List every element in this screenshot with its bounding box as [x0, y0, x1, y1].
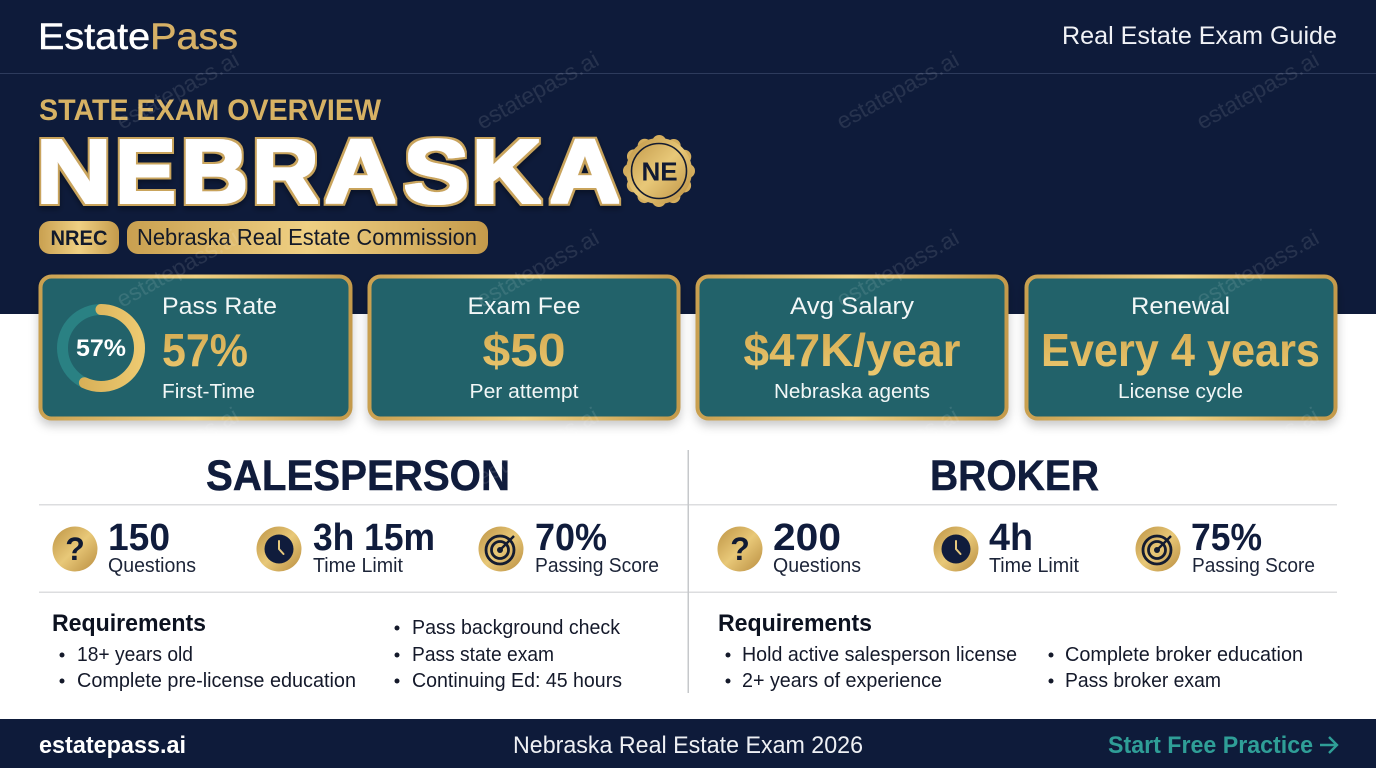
requirements heading: Requirements	[52, 610, 206, 637]
icon: question	[718, 526, 762, 572]
footer title: Nebraska Real Estate Exam 2026	[513, 732, 863, 759]
stat: time limit	[989, 517, 1079, 577]
icon: question	[52, 526, 98, 572]
pass rate label: Pass Rate	[162, 293, 277, 320]
watermarks: estatepass.ai	[1192, 224, 1323, 312]
pass rate note: First-Time	[162, 381, 255, 403]
title: NEBRASKA: N	[36, 121, 112, 222]
title: NEBRASKA: S	[404, 121, 469, 222]
salary label: Avg Salary	[790, 293, 914, 320]
requirements list, column one	[60, 644, 356, 692]
donut chart: 57%: 57%	[76, 335, 126, 362]
stat: time limit: 3h 15m	[313, 517, 435, 559]
stat: time limit	[313, 517, 435, 577]
requirements list, column two: Continuing Ed: 45 hours	[412, 670, 622, 692]
stat: questions: 150	[108, 517, 170, 559]
stat: passing score: 75%	[1191, 517, 1262, 559]
footer call to action: Start Free Practice	[1108, 732, 1313, 759]
icon: arrow	[1320, 737, 1337, 753]
watermarks: estatepass.ai	[112, 46, 243, 134]
title: NEBRASKA: A	[550, 121, 620, 222]
stat: passing score: Passing Score	[535, 555, 659, 577]
icon: question: ?	[65, 531, 85, 567]
watermarks: estatepass.ai	[1192, 46, 1323, 134]
renewal value: Every 4 years	[1041, 324, 1320, 376]
icon: target	[478, 526, 524, 572]
title: NEBRASKA: B	[181, 122, 248, 222]
salary note: Nebraska agents	[774, 381, 930, 403]
watermarks: estatepass.ai	[472, 224, 603, 312]
requirements list, column two	[394, 617, 622, 692]
requirements list, column two: Pass state exam	[412, 644, 554, 666]
panel: exam fee card	[370, 276, 678, 418]
header tagline: Real Estate Exam Guide	[1062, 22, 1337, 50]
pass rate value: 57%	[162, 324, 248, 376]
pill: Nebraska Real Estate Commission: Nebraska Real Estate Commission	[137, 224, 477, 250]
watermarks: estatepass.ai	[112, 224, 243, 312]
title: NEBRASKA: A	[324, 122, 397, 222]
stat: passing score: Passing Score	[1192, 555, 1315, 577]
stat: questions	[773, 517, 861, 577]
watermarks: estatepass.ai	[832, 224, 963, 312]
watermarks: estatepass.ai	[1192, 402, 1323, 490]
icon: question: ?	[730, 531, 750, 567]
title: NEBRASKA	[36, 121, 620, 222]
footer site name: estatepass.ai	[39, 732, 186, 759]
stat: questions	[108, 517, 196, 577]
requirements list, column one	[726, 644, 1017, 692]
icon: clock	[256, 526, 302, 572]
requirements list, column one: 2+ years of experience	[742, 670, 942, 692]
stat: time limit: Time Limit	[313, 555, 403, 577]
salary value: $47K/year	[744, 324, 961, 376]
pill: NREC: NREC	[50, 227, 108, 250]
exam fee note: Per attempt	[470, 381, 579, 403]
title: NEBRASKA: R	[252, 122, 318, 222]
badge: NE seal	[626, 138, 692, 204]
watermarks: estatepass.ai	[832, 402, 963, 490]
eyebrow heading: STATE EXAM OVERVIEW	[39, 94, 382, 127]
stat: questions: Questions	[108, 555, 196, 577]
requirements list, column two: Pass background check	[412, 617, 621, 639]
stat: passing score	[535, 517, 659, 577]
stat: passing score	[1191, 517, 1315, 577]
stat: time limit: Time Limit	[989, 555, 1079, 577]
title: NEBRASKA: E	[115, 122, 176, 222]
stat: questions: 200	[773, 517, 841, 559]
panel: salesperson	[52, 453, 659, 692]
footer bar	[0, 719, 1376, 768]
watermarks: estatepass.ai	[472, 402, 603, 490]
renewal note: License cycle	[1118, 381, 1243, 403]
donut chart: 57%	[62, 310, 140, 386]
header divider	[0, 73, 1376, 74]
requirements list, column one: Hold active salesperson license	[742, 644, 1017, 666]
panel: broker	[718, 453, 1315, 692]
logo: EstatePass: EstatePass	[38, 16, 238, 57]
exam fee label: Exam Fee	[468, 293, 580, 320]
renewal label: Renewal	[1131, 293, 1230, 320]
icon: clock	[934, 526, 978, 572]
stat: questions: Questions	[773, 555, 861, 577]
watermarks	[112, 46, 1323, 490]
navy hero background	[0, 0, 1376, 314]
requirements list, column two	[1048, 644, 1303, 692]
exam fee value: $50	[482, 324, 566, 376]
requirements list, column one: Complete pre-license education	[77, 670, 356, 692]
heading: SALESPERSON: SALESPERSON	[206, 453, 510, 500]
panel: pass rate card	[40, 276, 350, 418]
watermarks: estatepass.ai	[112, 402, 243, 490]
panel: renewal card	[1026, 276, 1336, 418]
requirements list, column two: Pass broker exam	[1065, 670, 1221, 692]
watermarks: estatepass.ai	[832, 46, 963, 134]
pill: NREC	[39, 221, 119, 254]
section divider lines	[39, 450, 1337, 693]
requirements list, column one: 18+ years old	[77, 644, 193, 666]
icon: target	[1136, 526, 1180, 572]
heading: BROKER: BROKER	[930, 453, 1099, 500]
requirements heading: Requirements	[718, 610, 872, 637]
panel: average salary card	[698, 276, 1006, 418]
badge: NE seal: NE	[641, 156, 678, 186]
requirements list, column two: Complete broker education	[1065, 644, 1303, 666]
stat: passing score: 70%	[535, 517, 607, 559]
title: NEBRASKA: K	[472, 121, 541, 222]
watermarks: estatepass.ai	[472, 46, 603, 134]
stat: time limit: 4h	[989, 517, 1033, 559]
